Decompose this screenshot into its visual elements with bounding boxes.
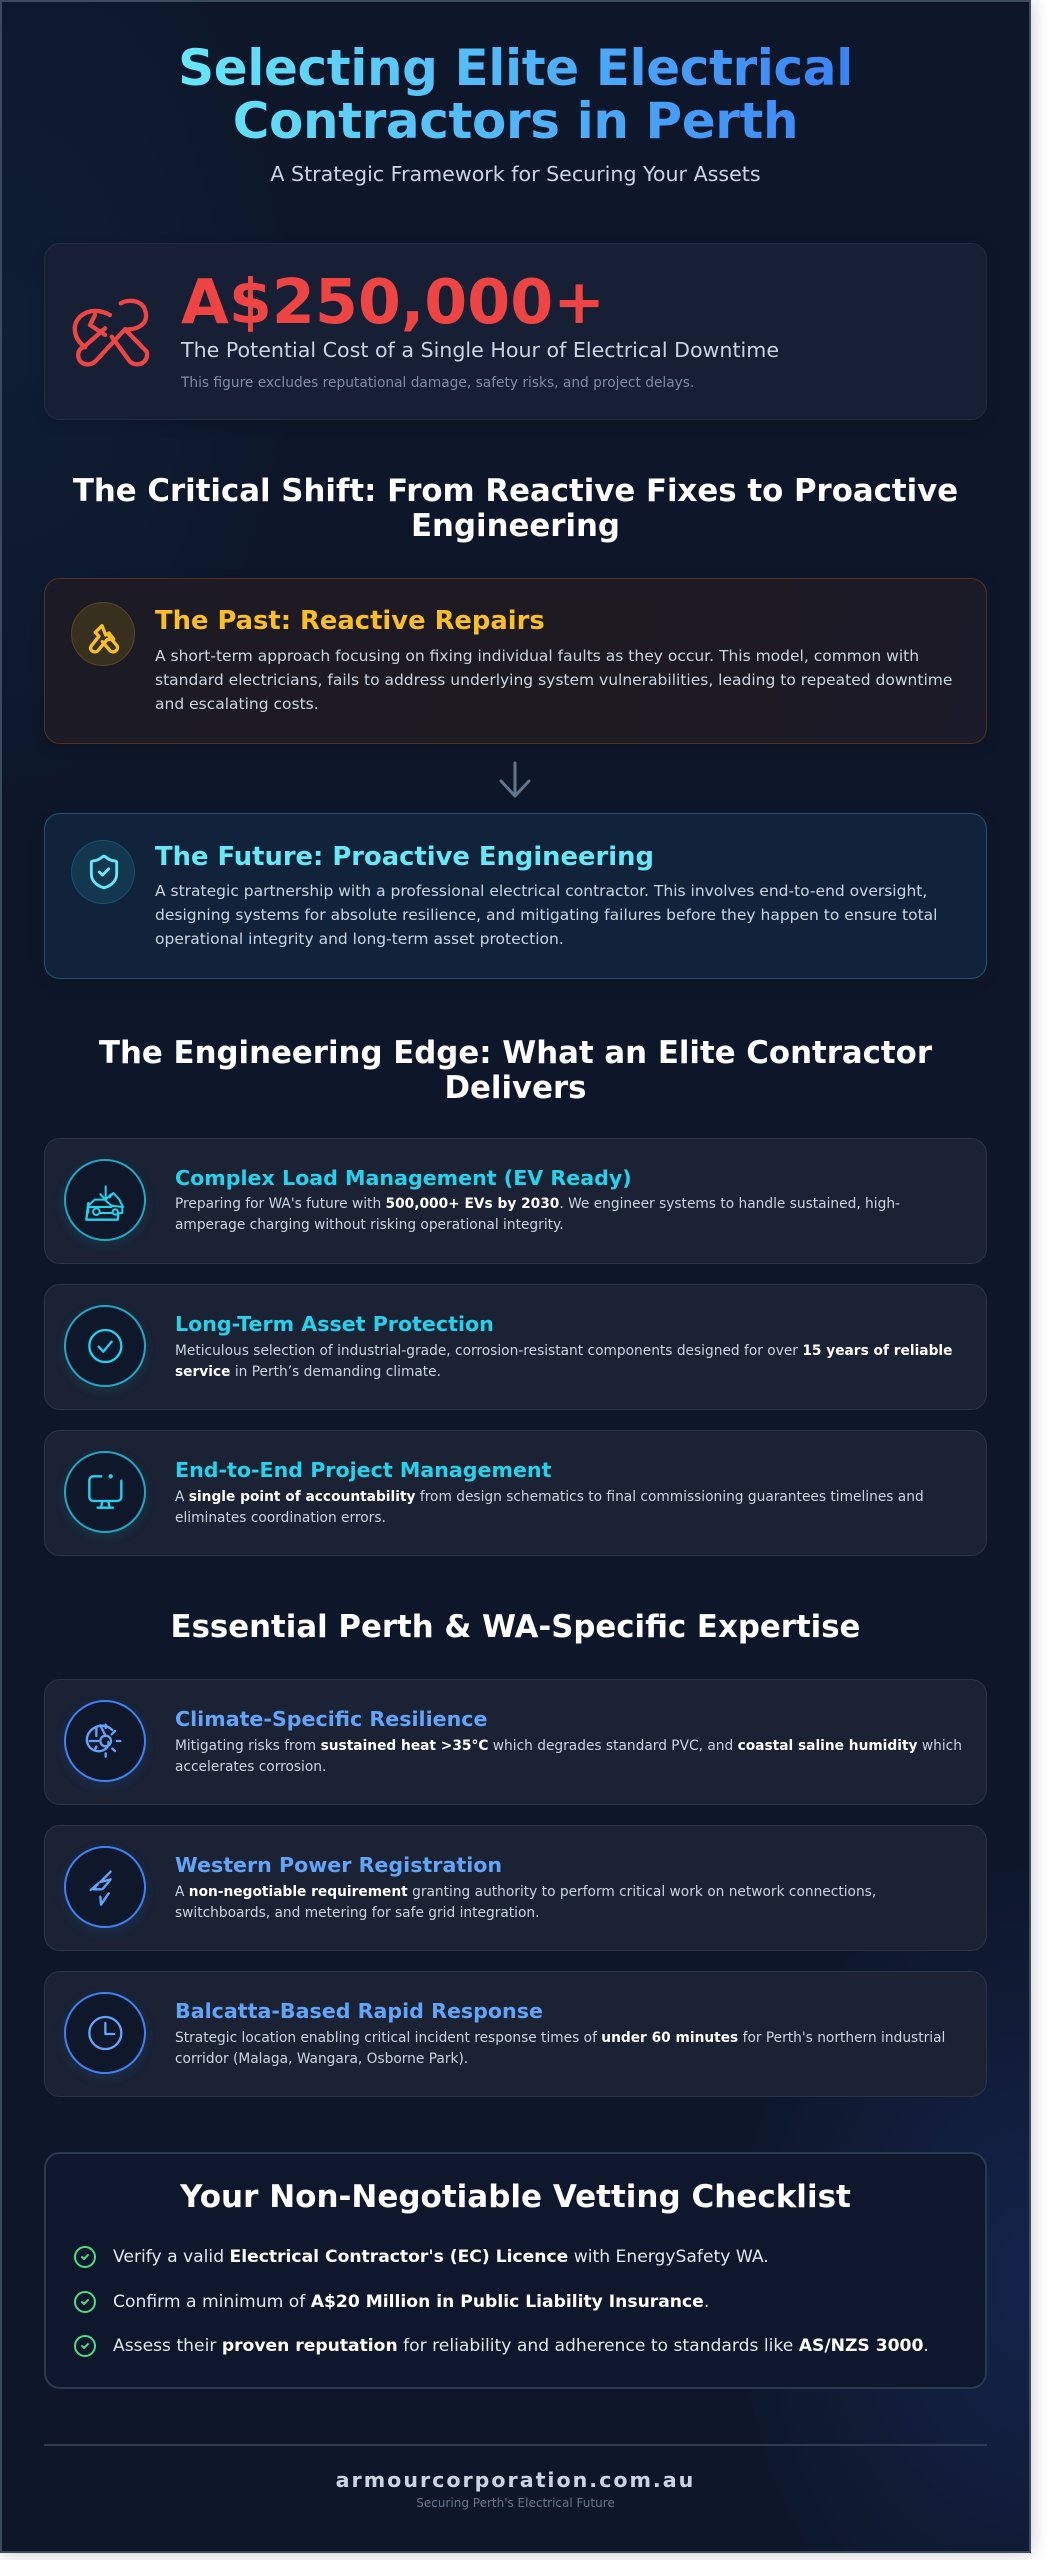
project body <box>175 1489 924 1526</box>
footer url: armourcorporation.com.au <box>336 2468 695 2492</box>
future heading: The Future: Proactive Engineering <box>155 842 654 872</box>
icon: clock <box>64 1992 146 2074</box>
checklist item 2: Confirm a minimum of A$20 Million in Public Liability Insurance. <box>113 2292 709 2312</box>
stat caption: The Potential Cost of a Single Hour of Electrical Downtime <box>181 338 779 362</box>
subtitle: A Strategic Framework for Securing Your Assets <box>270 162 761 186</box>
asset body: Meticulous selection of industrial-grade, corrosion-resistant components designed for over 15 years of reliable <box>175 1343 952 1359</box>
past body <box>155 647 952 713</box>
heading: engineering edge: Delivers <box>444 1070 587 1106</box>
past heading: The Past: Reactive Repairs <box>155 606 545 636</box>
icon: lightning <box>64 1846 146 1928</box>
stat note: This figure excludes reputational damage, safety risks, and project delays. <box>181 375 694 391</box>
climate body: Mitigating risks from sustained heat >35°C which degrades standard PVC, and coastal saline humidity which <box>175 1738 962 1754</box>
icon: monitor <box>64 1451 146 1533</box>
asset body: service in Perth’s demanding climate. <box>175 1364 441 1380</box>
project body: eliminates coordination errors. <box>175 1510 386 1526</box>
checklist item 1: Verify a valid Electrical Contractor's (EC) Licence with EnergySafety WA. <box>113 2247 769 2267</box>
panel: load management <box>44 1138 987 1264</box>
climate body: accelerates corrosion. <box>175 1759 326 1775</box>
icon: sun <box>64 1700 146 1782</box>
panel: asset protection <box>44 1284 987 1410</box>
checklist heading: Your Non-Negotiable Vetting Checklist <box>180 2179 851 2215</box>
response body: corridor (Malaga, Wangara, Osborne Park). <box>175 2051 468 2067</box>
heading: perth expertise: Essential Perth & WA-Specific Expertise <box>171 1609 860 1645</box>
big stat: A$250,000+ <box>181 266 605 338</box>
title <box>178 39 853 150</box>
past body: standard electricians, fails to address underlying system vulnerabilities, leading to repeated downtime <box>155 671 952 689</box>
title: Contractors in Perth <box>233 92 798 150</box>
response body: Strategic location enabling critical incident response times of under 60 minutes for Perth's northern industrial <box>175 2030 945 2046</box>
panel: climate <box>44 1679 987 1805</box>
heading: engineering edge <box>99 1035 932 1106</box>
icon: check circle <box>64 1305 146 1387</box>
past body: and escalating costs. <box>155 695 319 713</box>
asset heading: Long-Term Asset Protection <box>175 1312 494 1336</box>
icon: crossed tools red <box>72 298 150 367</box>
response heading: Balcatta-Based Rapid Response <box>175 1999 543 2023</box>
future body: A strategic partnership with a professional electrical contractor. This involves end-to-end oversight, <box>155 882 927 900</box>
load heading: Complex Load Management (EV Ready) <box>175 1166 632 1190</box>
panel: the past <box>44 578 987 744</box>
panel: the future <box>44 813 987 979</box>
climate body <box>175 1738 962 1775</box>
project body: A single point of accountability from design schematics to final commissioning guarantees timelines and <box>175 1489 924 1505</box>
western body: switchboards, and metering for safe grid integration. <box>175 1905 539 1921</box>
icon: EV car <box>64 1159 146 1241</box>
icon: shield <box>71 840 135 904</box>
western heading: Western Power Registration <box>175 1853 502 1877</box>
future body: designing systems for absolute resilience, and mitigating failures before they happen to ensure total <box>155 906 937 924</box>
heading: engineering edge: The Engineering Edge: What an Elite Contractor <box>99 1035 932 1071</box>
panel: downtime cost <box>44 243 987 420</box>
panel: project management <box>44 1430 987 1556</box>
western body <box>175 1884 876 1921</box>
heading: critical shift: The Critical Shift: From Reactive Fixes to Proactive <box>73 473 958 509</box>
panel: western power <box>44 1825 987 1951</box>
past body: A short-term approach focusing on fixing individual faults as they occur. This model, common with <box>155 647 919 665</box>
project heading: End-to-End Project Management <box>175 1458 551 1482</box>
footer tagline: Securing Perth's Electrical Future <box>416 2496 615 2510</box>
checklist item 3: Assess their proven reputation for reliability and adherence to standards like AS/NZS 3000. <box>113 2336 929 2356</box>
asset body <box>175 1343 952 1380</box>
heading: critical shift <box>73 473 958 544</box>
panel: checklist <box>44 2152 987 2389</box>
panel: rapid response <box>44 1971 987 2097</box>
climate heading: Climate-Specific Resilience <box>175 1707 487 1731</box>
load body <box>175 1196 900 1233</box>
load body: Preparing for WA's future with 500,000+ EVs by 2030. We engineer systems to handle sustained, high- <box>175 1196 900 1212</box>
future body: operational integrity and long-term asset protection. <box>155 930 564 948</box>
icon: past tools <box>71 602 135 666</box>
heading: critical shift: Engineering <box>411 508 620 544</box>
response body <box>175 2030 945 2067</box>
future body <box>155 882 937 948</box>
arrow down <box>500 762 530 798</box>
western body: A non-negotiable requirement granting authority to perform critical work on network connections, <box>175 1884 876 1900</box>
title: Selecting Elite Electrical <box>178 39 853 97</box>
load body: amperage charging without risking operational integrity. <box>175 1217 564 1233</box>
